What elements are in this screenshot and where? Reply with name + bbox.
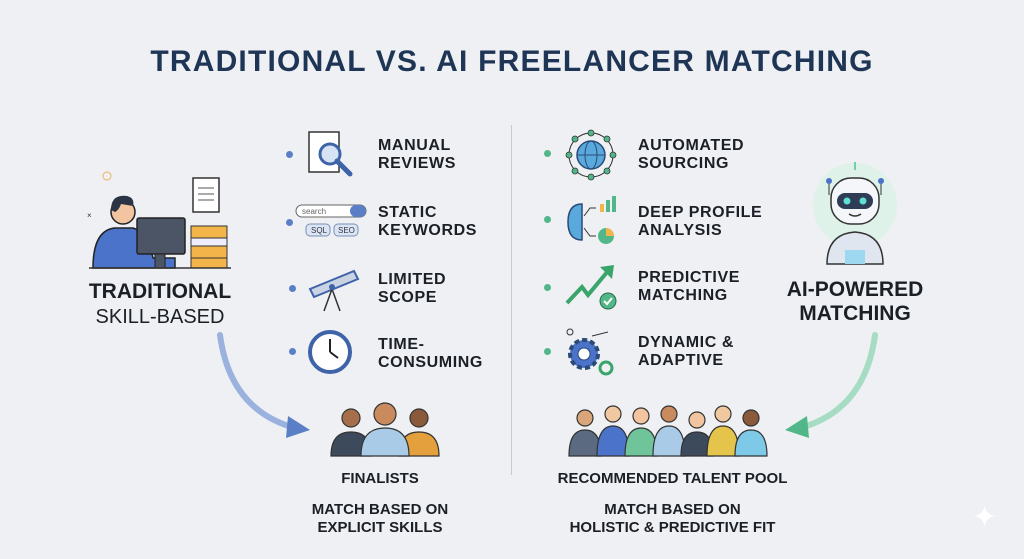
text: explicit skills: EXPLICIT SKILLS	[317, 519, 442, 536]
illustration: traditional worker	[87, 172, 231, 269]
label: AI-powered: AI-POWERED	[787, 278, 923, 301]
item: static keywords: KEYWORDS	[378, 222, 477, 239]
item: predictive matching	[544, 265, 740, 310]
item: dynamic adaptive: ADAPTIVE	[638, 352, 724, 369]
item: time consuming	[289, 330, 483, 374]
illustration: traditional worker: ×	[87, 211, 92, 220]
title: TRADITIONAL VS. AI FREELANCER MATCHING	[150, 45, 874, 78]
item: predictive matching: PREDICTIVE	[638, 269, 740, 286]
label: finalists: FINALISTS	[341, 470, 419, 487]
label: talent pool: RECOMMENDED TALENT POOL	[558, 470, 787, 487]
text: explicit skills: MATCH BASED ON	[312, 501, 448, 518]
item: deep profile analysis: DEEP PROFILE	[638, 204, 762, 221]
arrow: AI to talent pool	[785, 332, 878, 438]
item: dynamic adaptive: DYNAMIC &	[638, 334, 734, 351]
item: dynamic adaptive	[544, 328, 734, 376]
item: manual reviews: REVIEWS	[378, 155, 456, 172]
list: AI	[544, 130, 762, 376]
item: manual reviews	[286, 131, 456, 176]
item: automated sourcing: AUTOMATED	[638, 137, 744, 154]
label: traditional: SKILL-BASED	[96, 306, 224, 328]
item: static keywords: search	[302, 207, 326, 216]
text: holistic fit: MATCH BASED ON	[604, 501, 741, 518]
illustration: robot	[813, 162, 897, 265]
item: automated sourcing	[544, 130, 744, 180]
list: traditional	[286, 131, 483, 374]
item: manual reviews: MANUAL	[378, 137, 451, 154]
text: holistic fit	[570, 501, 776, 536]
label: traditional	[89, 280, 231, 328]
arrow: traditional to finalists	[217, 332, 310, 438]
item: limited scope	[289, 270, 446, 312]
item: time consuming: CONSUMING	[378, 354, 483, 371]
divider	[511, 125, 512, 475]
item: deep profile analysis: ANALYSIS	[638, 222, 722, 239]
item: static keywords: SQL	[311, 226, 328, 235]
label: traditional: TRADITIONAL	[89, 280, 231, 303]
item: limited scope: SCOPE	[378, 289, 437, 306]
item: time consuming: TIME-	[378, 336, 425, 353]
item: static keywords: SEO	[338, 226, 355, 235]
item: static keywords: STATIC	[378, 204, 437, 221]
item: limited scope: LIMITED	[378, 271, 446, 288]
item: automated sourcing: SOURCING	[638, 155, 729, 172]
group: finalists	[330, 402, 440, 457]
group: talent pool	[568, 405, 768, 457]
text: holistic fit: HOLISTIC & PREDICTIVE FIT	[570, 519, 775, 536]
icon: sparkle: ✦	[972, 501, 997, 534]
label: AI-powered	[787, 278, 923, 325]
text: explicit skills	[312, 501, 448, 536]
item: predictive matching: MATCHING	[638, 287, 728, 304]
label: AI-powered: MATCHING	[799, 302, 911, 325]
item: static keywords	[286, 204, 477, 239]
item: deep profile analysis	[544, 196, 762, 244]
